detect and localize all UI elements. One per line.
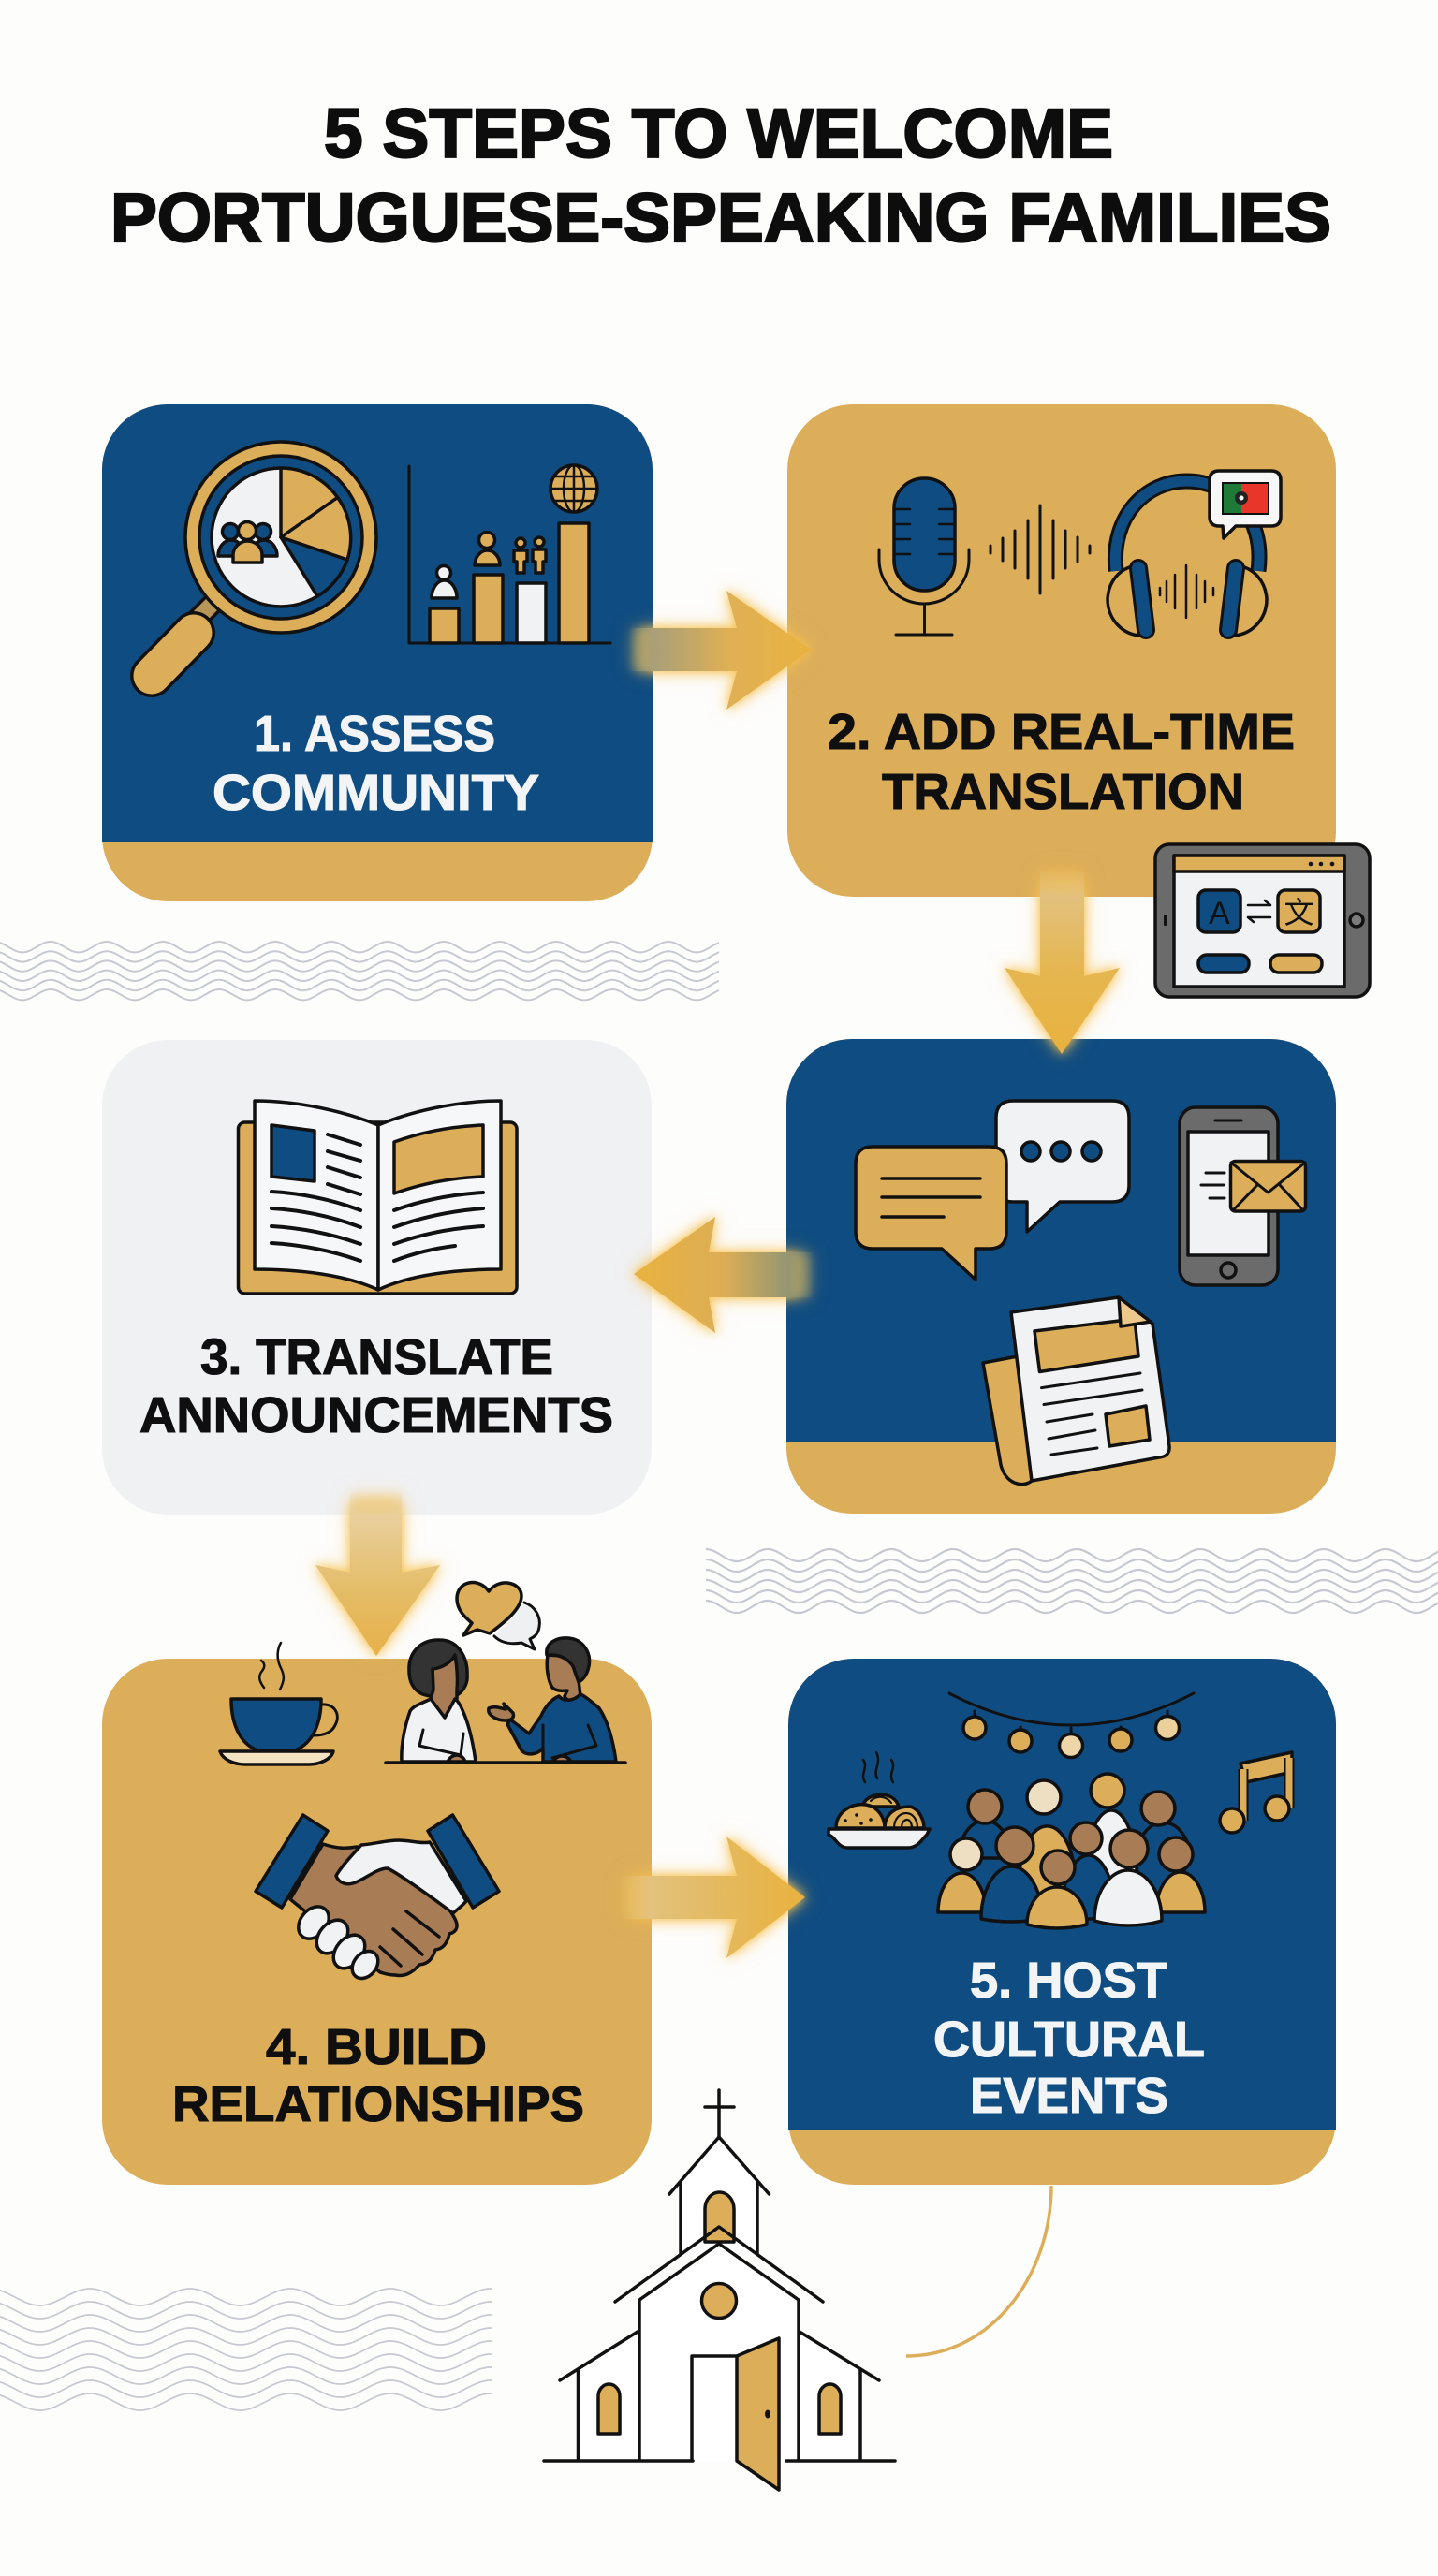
bar chart with people and globe [409, 465, 610, 643]
icon: sound wave [990, 505, 1090, 593]
icon: gold speech bubble [856, 1147, 1006, 1280]
church door [737, 2338, 779, 2490]
wave pattern: upper left [0, 941, 719, 1002]
icon: chat bubbles with heart [457, 1583, 539, 1649]
man [489, 1638, 616, 1762]
heading: step 5: 5. HOST [970, 1953, 1167, 2009]
icon: tablet with translation app [1155, 844, 1370, 997]
panel: communication channels [786, 1039, 1336, 1514]
icon: globe [550, 465, 597, 512]
arrow: step 4 to step 5 [621, 1837, 805, 1958]
woman [402, 1640, 476, 1762]
arrow: step 1 to step 2 [629, 591, 811, 710]
title [110, 95, 1331, 256]
title: 5 STEPS TO WELCOME [324, 95, 1113, 172]
heading: step 1 [213, 706, 539, 821]
panel: step 1 assess community [102, 404, 653, 901]
heading: step 3: ANNOUNCEMENTS [139, 1387, 613, 1443]
icon: phone with envelope [1180, 1107, 1305, 1285]
icon: food dish [829, 1752, 930, 1848]
icon: music note [1220, 1752, 1292, 1833]
wave pattern: lower left [0, 2288, 492, 2411]
heading: step 5 [933, 1953, 1205, 2124]
heading: step 1: 1. ASSESS [254, 706, 495, 762]
arrow: step 3 down to step 4 [315, 1491, 440, 1656]
heading: step 2: 2. ADD REAL-TIME [828, 704, 1295, 760]
heading: step 3: 3. TRANSLATE [200, 1329, 553, 1385]
connector curve to church [906, 2186, 1051, 2356]
heading: step 1: COMMUNITY [213, 765, 539, 821]
icon: crowd of people [938, 1774, 1205, 1928]
icon: magnifying glass with pie chart [152, 442, 376, 676]
icon: microphone [879, 478, 969, 635]
icon: newspaper [983, 1297, 1169, 1485]
icon: two people talking [386, 1583, 625, 1763]
icon: white speech bubble [996, 1101, 1129, 1232]
arrow: step 2 down to channels [1005, 868, 1120, 1054]
icon: string lights [949, 1693, 1194, 1758]
icon: handshake [256, 1815, 499, 1983]
icon: tablet with translation app: 文 [1284, 889, 1314, 932]
heading: step 4: RELATIONSHIPS [172, 2076, 584, 2132]
church steeple [669, 2090, 770, 2256]
heading: step 5: CULTURAL [933, 2012, 1205, 2068]
icon: headphones [1108, 481, 1267, 636]
heading: step 5: EVENTS [970, 2068, 1168, 2124]
panel: step 3 translate announcements [102, 1040, 652, 1515]
heading: step 3 [139, 1329, 613, 1443]
heading: step 4 [172, 2019, 584, 2132]
icon: church with open door [544, 2090, 895, 2490]
panel: step 2 real-time translation [787, 404, 1370, 997]
icon: speech bubble with Portuguese flag [1210, 471, 1281, 538]
wave pattern: middle right [706, 1548, 1438, 1614]
panel: step 5 host cultural events [788, 1659, 1336, 2185]
heading: step 4: 4. BUILD [266, 2019, 487, 2075]
church main body [544, 2227, 895, 2461]
arrow: channels to step 3 [634, 1217, 814, 1333]
heading: step 2 [828, 704, 1295, 820]
heading: step 2: TRANSLATION [882, 764, 1244, 820]
icon: tablet with translation app: A [1209, 896, 1230, 931]
icon: open book [238, 1101, 517, 1294]
panel: step 4 build relationships [102, 1659, 652, 2185]
icon: coffee cup [220, 1643, 337, 1764]
title: PORTUGUESE-SPEAKING FAMILIES [110, 179, 1331, 256]
